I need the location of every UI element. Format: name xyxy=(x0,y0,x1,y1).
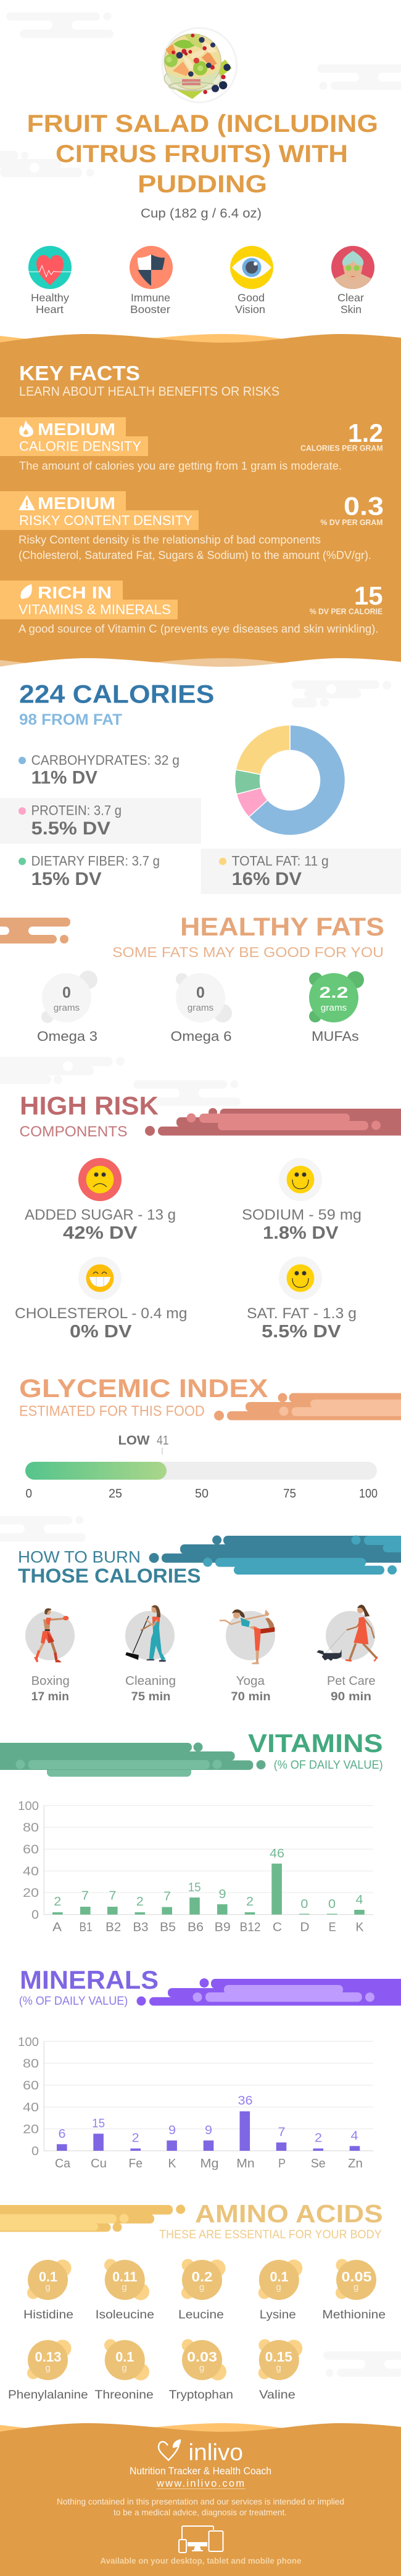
risk: added sugar: 42% DV xyxy=(63,1223,138,1243)
activity: yoga xyxy=(220,1609,275,1703)
amino acid: leucine: 0.2 xyxy=(191,2269,212,2285)
amino acid: threonine: g xyxy=(122,2363,127,2373)
amino acid: valine xyxy=(258,2339,302,2402)
macro: total fat: 16% DV xyxy=(232,869,302,889)
fact: rich in vitamins and minerals: VITAMINS & MINERALS xyxy=(19,602,171,618)
bar chart: minerals: Mn xyxy=(236,2157,255,2170)
risk: added sugar xyxy=(25,1158,176,1243)
gauge: glycemic index: LOW xyxy=(118,1433,150,1448)
subheading: calories from fat: 98 FROM FAT xyxy=(19,711,122,728)
amino acid: valine: 0.15 xyxy=(265,2349,292,2365)
fat: omega 3: 0 xyxy=(62,984,71,1001)
benefit: clear skin: Clear xyxy=(337,291,364,304)
gauge: glycemic index: 41 xyxy=(157,1433,169,1448)
bar chart: vitamins: 4 xyxy=(355,1893,363,1907)
title: PUDDING xyxy=(138,171,267,198)
macro: protein: PROTEIN: 3.7 g xyxy=(31,803,122,818)
gauge: glycemic index: 75 xyxy=(283,1487,296,1501)
bar chart: vitamins: B12 xyxy=(239,1920,260,1934)
macro: protein: 5.5% DV xyxy=(31,818,110,839)
risk: cholesterol: 0% DV xyxy=(70,1322,132,1342)
bar chart: vitamins: B6 xyxy=(188,1920,204,1934)
bar chart: vitamins: 0 xyxy=(31,1908,39,1922)
bar chart: minerals: 7 xyxy=(278,2126,285,2139)
macro: carbohydrates: 11% DV xyxy=(31,768,97,788)
amino acid: valine: g xyxy=(276,2363,281,2373)
amino acid: lysine: g xyxy=(276,2282,281,2293)
benefit: clear skin xyxy=(331,246,374,316)
decoration: high risk swoosh xyxy=(145,1108,401,1136)
bar chart: vitamins: D xyxy=(300,1920,310,1934)
donut chart: macronutrients xyxy=(234,725,345,836)
gauge: glycemic index xyxy=(25,1433,378,1501)
bar chart: vitamins: 80 xyxy=(23,1821,39,1835)
decoration: amino acids swoosh xyxy=(0,2205,185,2232)
amino acid: isoleucine: g xyxy=(122,2282,127,2293)
bar chart: minerals: 9 xyxy=(168,2124,176,2137)
macro: dietary fiber: DIETARY FIBER: 3.7 g xyxy=(31,854,160,869)
amino acid: methionine: g xyxy=(353,2282,358,2293)
gauge: glycemic index: 50 xyxy=(195,1487,209,1501)
bar chart: vitamins: 46 xyxy=(270,1847,284,1861)
bar chart: vitamins: B1 xyxy=(79,1920,93,1934)
benefit: immune booster: Booster xyxy=(130,303,170,316)
background clouds: header xyxy=(0,12,401,177)
risk: saturated fat: 5.5% DV xyxy=(262,1322,341,1342)
title xyxy=(27,110,378,198)
activity: yoga: Yoga xyxy=(236,1674,265,1688)
fact: risky content density: RISKY CONTENT DENSITY xyxy=(19,513,192,528)
amino acid: leucine xyxy=(178,2259,226,2321)
macro: carbohydrates xyxy=(19,752,180,788)
amino acid: histidine xyxy=(23,2259,73,2321)
bar chart: vitamins: A xyxy=(52,1920,62,1934)
tagline: Nutrition Tracker & Health Coach xyxy=(130,2465,271,2477)
decoration: vitamins swoosh xyxy=(0,1743,265,1777)
decoration: burn calories swoosh xyxy=(149,1536,401,1575)
amino acid: valine: Valine xyxy=(259,2388,296,2402)
fact: rich in vitamins and minerals: 15 xyxy=(354,581,383,610)
amino acid: threonine: 0.1 xyxy=(115,2349,134,2365)
fact: risky content density xyxy=(0,491,384,561)
amino acid: leucine: g xyxy=(199,2282,204,2293)
decoration: glycemic swoosh xyxy=(214,1393,401,1420)
bar chart: minerals: 36 xyxy=(238,2094,253,2108)
activity: boxing xyxy=(25,1608,75,1703)
activity: pet care: Pet Care xyxy=(327,1674,376,1688)
amino acid: tryptophan: Tryptophan xyxy=(169,2388,233,2402)
bar chart: vitamins: 2 xyxy=(54,1895,61,1909)
bar chart: minerals xyxy=(18,2036,373,2170)
bar chart: minerals: Mg xyxy=(200,2157,218,2170)
subheading: components: COMPONENTS xyxy=(20,1123,127,1140)
benefit: good vision: Vision xyxy=(235,303,265,316)
risk: saturated fat xyxy=(247,1257,357,1342)
bar chart: vitamins: 7 xyxy=(81,1889,89,1903)
amino acid: lysine: 0.1 xyxy=(270,2269,289,2285)
macro: dietary fiber xyxy=(19,854,160,889)
subheading: vitamins: (% OF DAILY VALUE) xyxy=(274,1759,383,1772)
activity: cleaning xyxy=(125,1605,176,1703)
fat: mufas: MUFAs xyxy=(312,1029,359,1044)
fat: omega 6 xyxy=(170,973,232,1044)
fat: omega 6: grams xyxy=(188,1003,213,1013)
bar chart: vitamins: 0 xyxy=(300,1897,308,1911)
bar chart: vitamins xyxy=(18,1800,373,1934)
bar chart: vitamins: 2 xyxy=(136,1895,144,1909)
amino acid: lysine: Lysine xyxy=(260,2308,296,2321)
background cloud: burn calories xyxy=(0,1516,87,1542)
bar chart: minerals: P xyxy=(278,2157,286,2170)
amino acid: threonine: Threonine xyxy=(94,2388,154,2402)
bar chart: vitamins: B5 xyxy=(160,1920,176,1934)
fact: risky content density: % DV PER GRAM xyxy=(321,518,382,527)
amino acid: tryptophan xyxy=(169,2339,233,2402)
bar chart: vitamins: 100 xyxy=(18,1800,39,1813)
bar chart: minerals: 100 xyxy=(18,2036,39,2049)
macro: protein xyxy=(0,798,201,844)
background cloud: amino acids xyxy=(322,2352,401,2377)
benefit: clear skin: Skin xyxy=(341,303,362,316)
photo: fruit salad bowl xyxy=(162,28,237,102)
subheading: healthy fats: SOME FATS MAY BE GOOD FOR YOU xyxy=(112,944,384,960)
disclaimer xyxy=(57,2497,344,2517)
risk: cholesterol: CHOLESTEROL - 0.4 mg xyxy=(15,1305,188,1322)
fact: calorie density: The amount of calories you are getting from 1 gram is moderate. xyxy=(19,460,342,472)
background cloud: calories xyxy=(292,680,391,707)
disclaimer: to be a medical advice, diagnosis or treatment. xyxy=(114,2507,287,2517)
bar chart: minerals: Ca xyxy=(55,2157,71,2170)
fact: risky content density: (Cholesterol, Saturated Fat, Sugars & Sodium) to the amount (%DV/gr). xyxy=(19,549,371,561)
bar chart: vitamins: C xyxy=(273,1920,282,1934)
fact: rich in vitamins and minerals: RICH IN xyxy=(38,583,112,602)
decoration: healthy fats swoosh xyxy=(0,918,78,944)
risk: sodium xyxy=(242,1158,362,1243)
bar chart: vitamins: 60 xyxy=(23,1843,39,1856)
amino acid: leucine: Leucine xyxy=(178,2308,224,2321)
bar chart: minerals: Fe xyxy=(128,2157,143,2170)
amino acid: methionine: Methionine xyxy=(322,2308,386,2321)
fact: calorie density: 1.2 xyxy=(348,418,383,447)
benefit: healthy heart xyxy=(28,246,72,316)
amino acid: phenylalanine: 0.13 xyxy=(35,2349,62,2365)
subheading: minerals: (% OF DAILY VALUE) xyxy=(19,1995,128,2008)
macro: carbohydrates: CARBOHYDRATES: 32 g xyxy=(31,752,180,768)
amino acid: isoleucine: Isoleucine xyxy=(96,2308,154,2321)
bar chart: vitamins: 40 xyxy=(23,1865,39,1878)
heading: how to burn: HOW TO BURN xyxy=(18,1548,141,1567)
bar chart: minerals: 2 xyxy=(315,2131,322,2145)
website: www.inlivo.com xyxy=(156,2478,244,2489)
macro: total fat: TOTAL FAT: 11 g xyxy=(232,854,329,869)
bar chart: minerals: 60 xyxy=(23,2079,39,2093)
background clouds: high risk xyxy=(0,1057,242,1106)
bar chart: minerals: 9 xyxy=(205,2124,212,2137)
bar chart: vitamins: 15 xyxy=(188,1881,201,1894)
amino acid: phenylalanine xyxy=(8,2340,88,2402)
bar chart: minerals: 2 xyxy=(132,2131,139,2145)
fact: calorie density: CALORIE DENSITY xyxy=(19,439,141,454)
fact: calorie density: CALORIES PER GRAM xyxy=(300,444,383,452)
bar chart: vitamins: 7 xyxy=(163,1889,171,1903)
bar chart: minerals: 40 xyxy=(23,2101,39,2114)
serving size: Cup (182 g / 6.4 oz) xyxy=(141,206,262,221)
activity: boxing: Boxing xyxy=(31,1674,70,1688)
title: CITRUS FRUITS) WITH xyxy=(56,141,348,168)
availability note: Available on your desktop, tablet and mobile phone xyxy=(100,2556,302,2566)
disclaimer: Nothing contained in this presentation and our services is intended or implied xyxy=(57,2497,344,2506)
risk: cholesterol xyxy=(15,1257,188,1342)
title: FRUIT SALAD (INCLUDING xyxy=(27,110,378,137)
risk: sodium: SODIUM - 59 mg xyxy=(242,1207,362,1223)
bar chart: vitamins: B3 xyxy=(133,1920,148,1934)
amino acid: phenylalanine: Phenylalanine xyxy=(8,2388,88,2402)
bar chart: vitamins: 9 xyxy=(218,1888,226,1901)
fat: mufas xyxy=(309,971,364,1044)
amino acid: histidine: 0.1 xyxy=(39,2269,57,2285)
bar chart: minerals: 4 xyxy=(350,2129,358,2143)
fact: rich in vitamins and minerals: % DV PER CALORIE xyxy=(310,608,382,616)
fat: mufas: grams xyxy=(321,1003,347,1013)
fact: calorie density xyxy=(0,417,383,472)
fat: omega 3: grams xyxy=(54,1003,80,1013)
heading: calories: 224 CALORIES xyxy=(19,680,214,709)
risk: saturated fat: SAT. FAT - 1.3 g xyxy=(247,1305,357,1322)
fact: rich in vitamins and minerals xyxy=(0,581,383,635)
risk: sodium: 1.8% DV xyxy=(263,1223,339,1243)
activity: yoga: 70 min xyxy=(231,1690,271,1703)
decoration: minerals swoosh xyxy=(137,1978,401,2005)
fat: omega 6: 0 xyxy=(196,984,205,1001)
subheading: key facts: LEARN ABOUT HEALTH BENEFITS OR RISKS xyxy=(19,385,279,399)
activity: pet care: 90 min xyxy=(331,1690,371,1703)
macro: total fat xyxy=(201,849,401,894)
gauge: glycemic index: 25 xyxy=(109,1487,122,1501)
amino acid: threonine xyxy=(94,2339,154,2402)
benefit: immune booster: Immune xyxy=(131,291,170,304)
amino acid: tryptophan: g xyxy=(199,2363,204,2373)
icon: inlivo heart logo xyxy=(159,2439,181,2460)
fact: risky content density: Risky Content density is the relationship of bad components xyxy=(19,534,321,546)
bar chart: vitamins: 20 xyxy=(23,1886,39,1900)
heading: glycemic index: GLYCEMIC INDEX xyxy=(19,1374,268,1403)
bar chart: vitamins: 2 xyxy=(246,1895,254,1909)
bar chart: minerals: K xyxy=(168,2157,176,2170)
fact: rich in vitamins and minerals: A good source of Vitamin C (prevents eye diseases and skin wrinkling). xyxy=(19,623,379,635)
fat: omega 3: Omega 3 xyxy=(37,1029,97,1044)
amino acid: tryptophan: 0.03 xyxy=(187,2349,217,2365)
activity: cleaning: Cleaning xyxy=(125,1674,176,1688)
heading: key facts: KEY FACTS xyxy=(19,362,140,385)
activity: boxing: 17 min xyxy=(31,1690,69,1703)
amino acid: lysine xyxy=(258,2259,302,2321)
logo wordmark: inlivo xyxy=(189,2440,243,2466)
bar chart: minerals: 80 xyxy=(23,2057,39,2071)
fact: calorie density: MEDIUM xyxy=(38,420,115,439)
bar chart: vitamins: B2 xyxy=(105,1920,121,1934)
bar chart: vitamins: 7 xyxy=(109,1889,116,1903)
bar chart: minerals: 15 xyxy=(92,2117,105,2130)
fact: risky content density: MEDIUM xyxy=(38,494,115,513)
benefit: healthy heart: Heart xyxy=(36,303,64,316)
bar chart: vitamins: K xyxy=(355,1920,364,1934)
bar chart: minerals: Zn xyxy=(348,2157,363,2170)
bar chart: minerals: Cu xyxy=(91,2157,107,2170)
panel: footer xyxy=(0,2423,401,2576)
subheading: amino acids: THESE ARE ESSENTIAL FOR YOUR BODY xyxy=(159,2228,382,2241)
amino acid: methionine xyxy=(322,2259,386,2321)
amino acid: isoleucine: 0.11 xyxy=(112,2269,137,2285)
amino acid: phenylalanine: g xyxy=(45,2363,51,2373)
fat: omega 6: Omega 6 xyxy=(170,1029,232,1044)
heading: minerals: MINERALS xyxy=(20,1965,159,1994)
heading: healthy fats: HEALTHY FATS xyxy=(180,912,384,941)
amino acid: methionine: 0.05 xyxy=(342,2269,371,2285)
bar chart: vitamins: B9 xyxy=(215,1920,231,1934)
amino acid: histidine: g xyxy=(45,2282,51,2293)
fat: omega 3 xyxy=(37,971,97,1044)
gauge: glycemic index: 0 xyxy=(26,1487,32,1501)
gauge: glycemic index: 100 xyxy=(359,1487,378,1501)
bar chart: vitamins: 0 xyxy=(328,1897,336,1911)
bar chart: minerals: 6 xyxy=(58,2127,65,2141)
bar chart: vitamins: E xyxy=(329,1920,336,1934)
icon: devices xyxy=(179,2526,223,2553)
fat: mufas: 2.2 xyxy=(320,984,348,1001)
subheading: glycemic index: ESTIMATED FOR THIS FOOD xyxy=(19,1403,205,1420)
amino acid: isoleucine xyxy=(96,2259,154,2321)
benefit: good vision xyxy=(230,246,273,316)
heading: those calories: THOSE CALORIES xyxy=(18,1565,201,1587)
activity: pet care xyxy=(316,1605,378,1703)
heading: high risk: HIGH RISK xyxy=(20,1091,159,1120)
fact: risky content density: 0.3 xyxy=(344,492,384,520)
benefit: healthy heart: Healthy xyxy=(31,291,69,304)
heading: vitamins: VITAMINS xyxy=(248,1729,383,1758)
benefit: immune booster xyxy=(130,246,173,316)
bar chart: minerals: Se xyxy=(311,2157,326,2170)
panel: key facts xyxy=(0,334,401,678)
benefit: good vision: Good xyxy=(238,291,265,304)
bar chart: minerals: 0 xyxy=(31,2145,39,2158)
heading: amino acids: AMINO ACIDS xyxy=(195,2199,383,2228)
macro: dietary fiber: 15% DV xyxy=(31,869,102,889)
amino acid: histidine: Histidine xyxy=(23,2308,73,2321)
risk: added sugar: ADDED SUGAR - 13 g xyxy=(25,1207,176,1223)
activity: cleaning: 75 min xyxy=(131,1690,170,1703)
bar chart: minerals: 20 xyxy=(23,2122,39,2136)
